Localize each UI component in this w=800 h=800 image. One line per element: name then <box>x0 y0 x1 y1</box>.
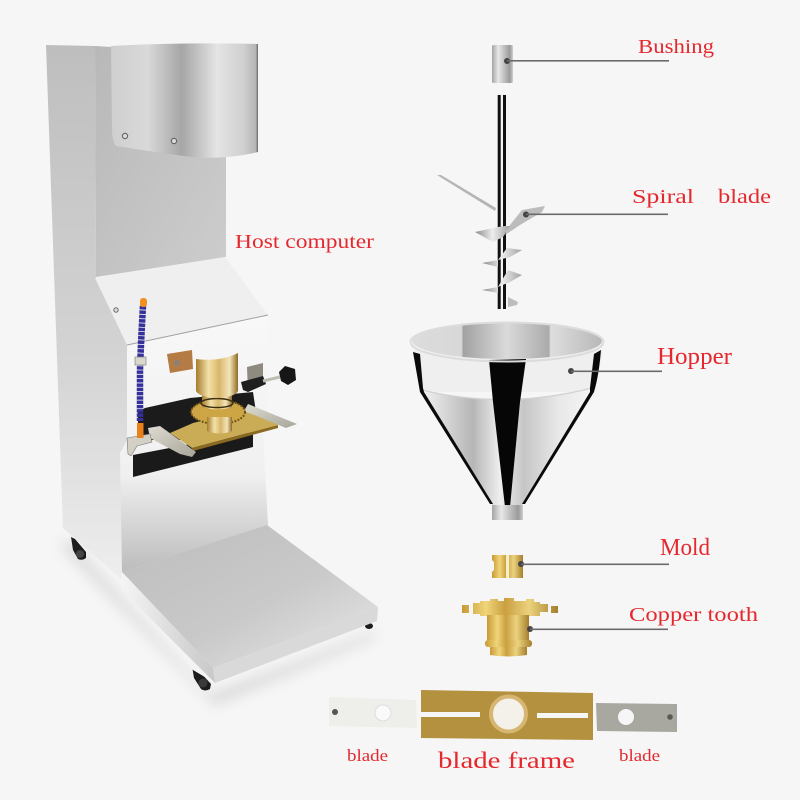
sloped panel lower edge <box>127 315 268 345</box>
spiral fins <box>475 226 510 242</box>
hose top tip <box>140 298 147 307</box>
cover screws <box>122 133 177 144</box>
brass gear stem <box>207 417 232 434</box>
label: bushing: Bushing <box>638 36 714 58</box>
right black edge <box>522 350 601 504</box>
brass cylinder <box>196 353 238 398</box>
part: hopper <box>410 322 662 520</box>
part: spiral blade shaft <box>437 95 668 309</box>
part: left blade <box>329 697 417 728</box>
hose clip <box>135 357 146 365</box>
left black edge <box>413 352 493 504</box>
part: mold <box>492 555 669 578</box>
label: right blade: blade <box>619 746 660 765</box>
gear teeth <box>462 598 558 616</box>
machine: host computer <box>46 43 380 705</box>
knob rod <box>263 377 280 381</box>
tooth flange <box>485 640 532 647</box>
hopper spout <box>492 505 523 520</box>
hopper upper body <box>413 350 603 392</box>
brass cylinder neck <box>202 394 232 410</box>
floor shadow <box>60 540 380 705</box>
label: spiral blade: Spiral <box>632 186 695 208</box>
brass gear <box>191 400 245 424</box>
label: mold: Mold <box>660 535 710 561</box>
sloped panel screw <box>114 308 118 312</box>
hopper interior <box>412 323 602 359</box>
part: right blade <box>596 703 677 732</box>
hopper cone <box>422 388 592 505</box>
brass mount plate <box>170 408 278 448</box>
hose lower tip <box>137 423 144 438</box>
part: blade frame <box>420 690 593 740</box>
collar ring <box>201 398 233 408</box>
machine casters <box>71 537 373 690</box>
label: left blade: blade <box>347 746 388 765</box>
label: blade frame: blade frame <box>438 748 575 773</box>
tooth bottom <box>490 647 527 656</box>
black knob <box>279 366 296 385</box>
upper paddle <box>505 206 545 235</box>
hopper rim <box>410 322 604 362</box>
lower black opening <box>133 432 253 477</box>
base plate side edge <box>122 572 215 683</box>
left rail clamp <box>148 426 196 457</box>
upper black opening <box>138 392 256 440</box>
machine back panel <box>95 46 226 277</box>
sloped panel <box>95 257 268 345</box>
right rail clamp <box>244 404 297 428</box>
machine top cover <box>111 43 258 158</box>
right bracket <box>247 363 263 392</box>
tooth body <box>487 615 529 641</box>
brass bracket <box>167 350 193 373</box>
label: host computer: Host computer <box>235 231 374 253</box>
base plate front edge <box>213 607 378 683</box>
machine side panel <box>46 45 215 683</box>
thin arm <box>437 175 496 211</box>
part: copper tooth <box>462 598 668 656</box>
center black reflection <box>489 359 526 507</box>
label: hopper: Hopper <box>657 344 732 370</box>
blue hose <box>140 306 143 421</box>
machine front panel <box>120 315 268 572</box>
label: copper tooth: Copper tooth <box>629 604 758 626</box>
hopper seam <box>422 388 592 400</box>
part: bushing <box>492 45 669 83</box>
base plate top <box>122 525 378 668</box>
label: spiral blade: blade <box>718 186 771 208</box>
